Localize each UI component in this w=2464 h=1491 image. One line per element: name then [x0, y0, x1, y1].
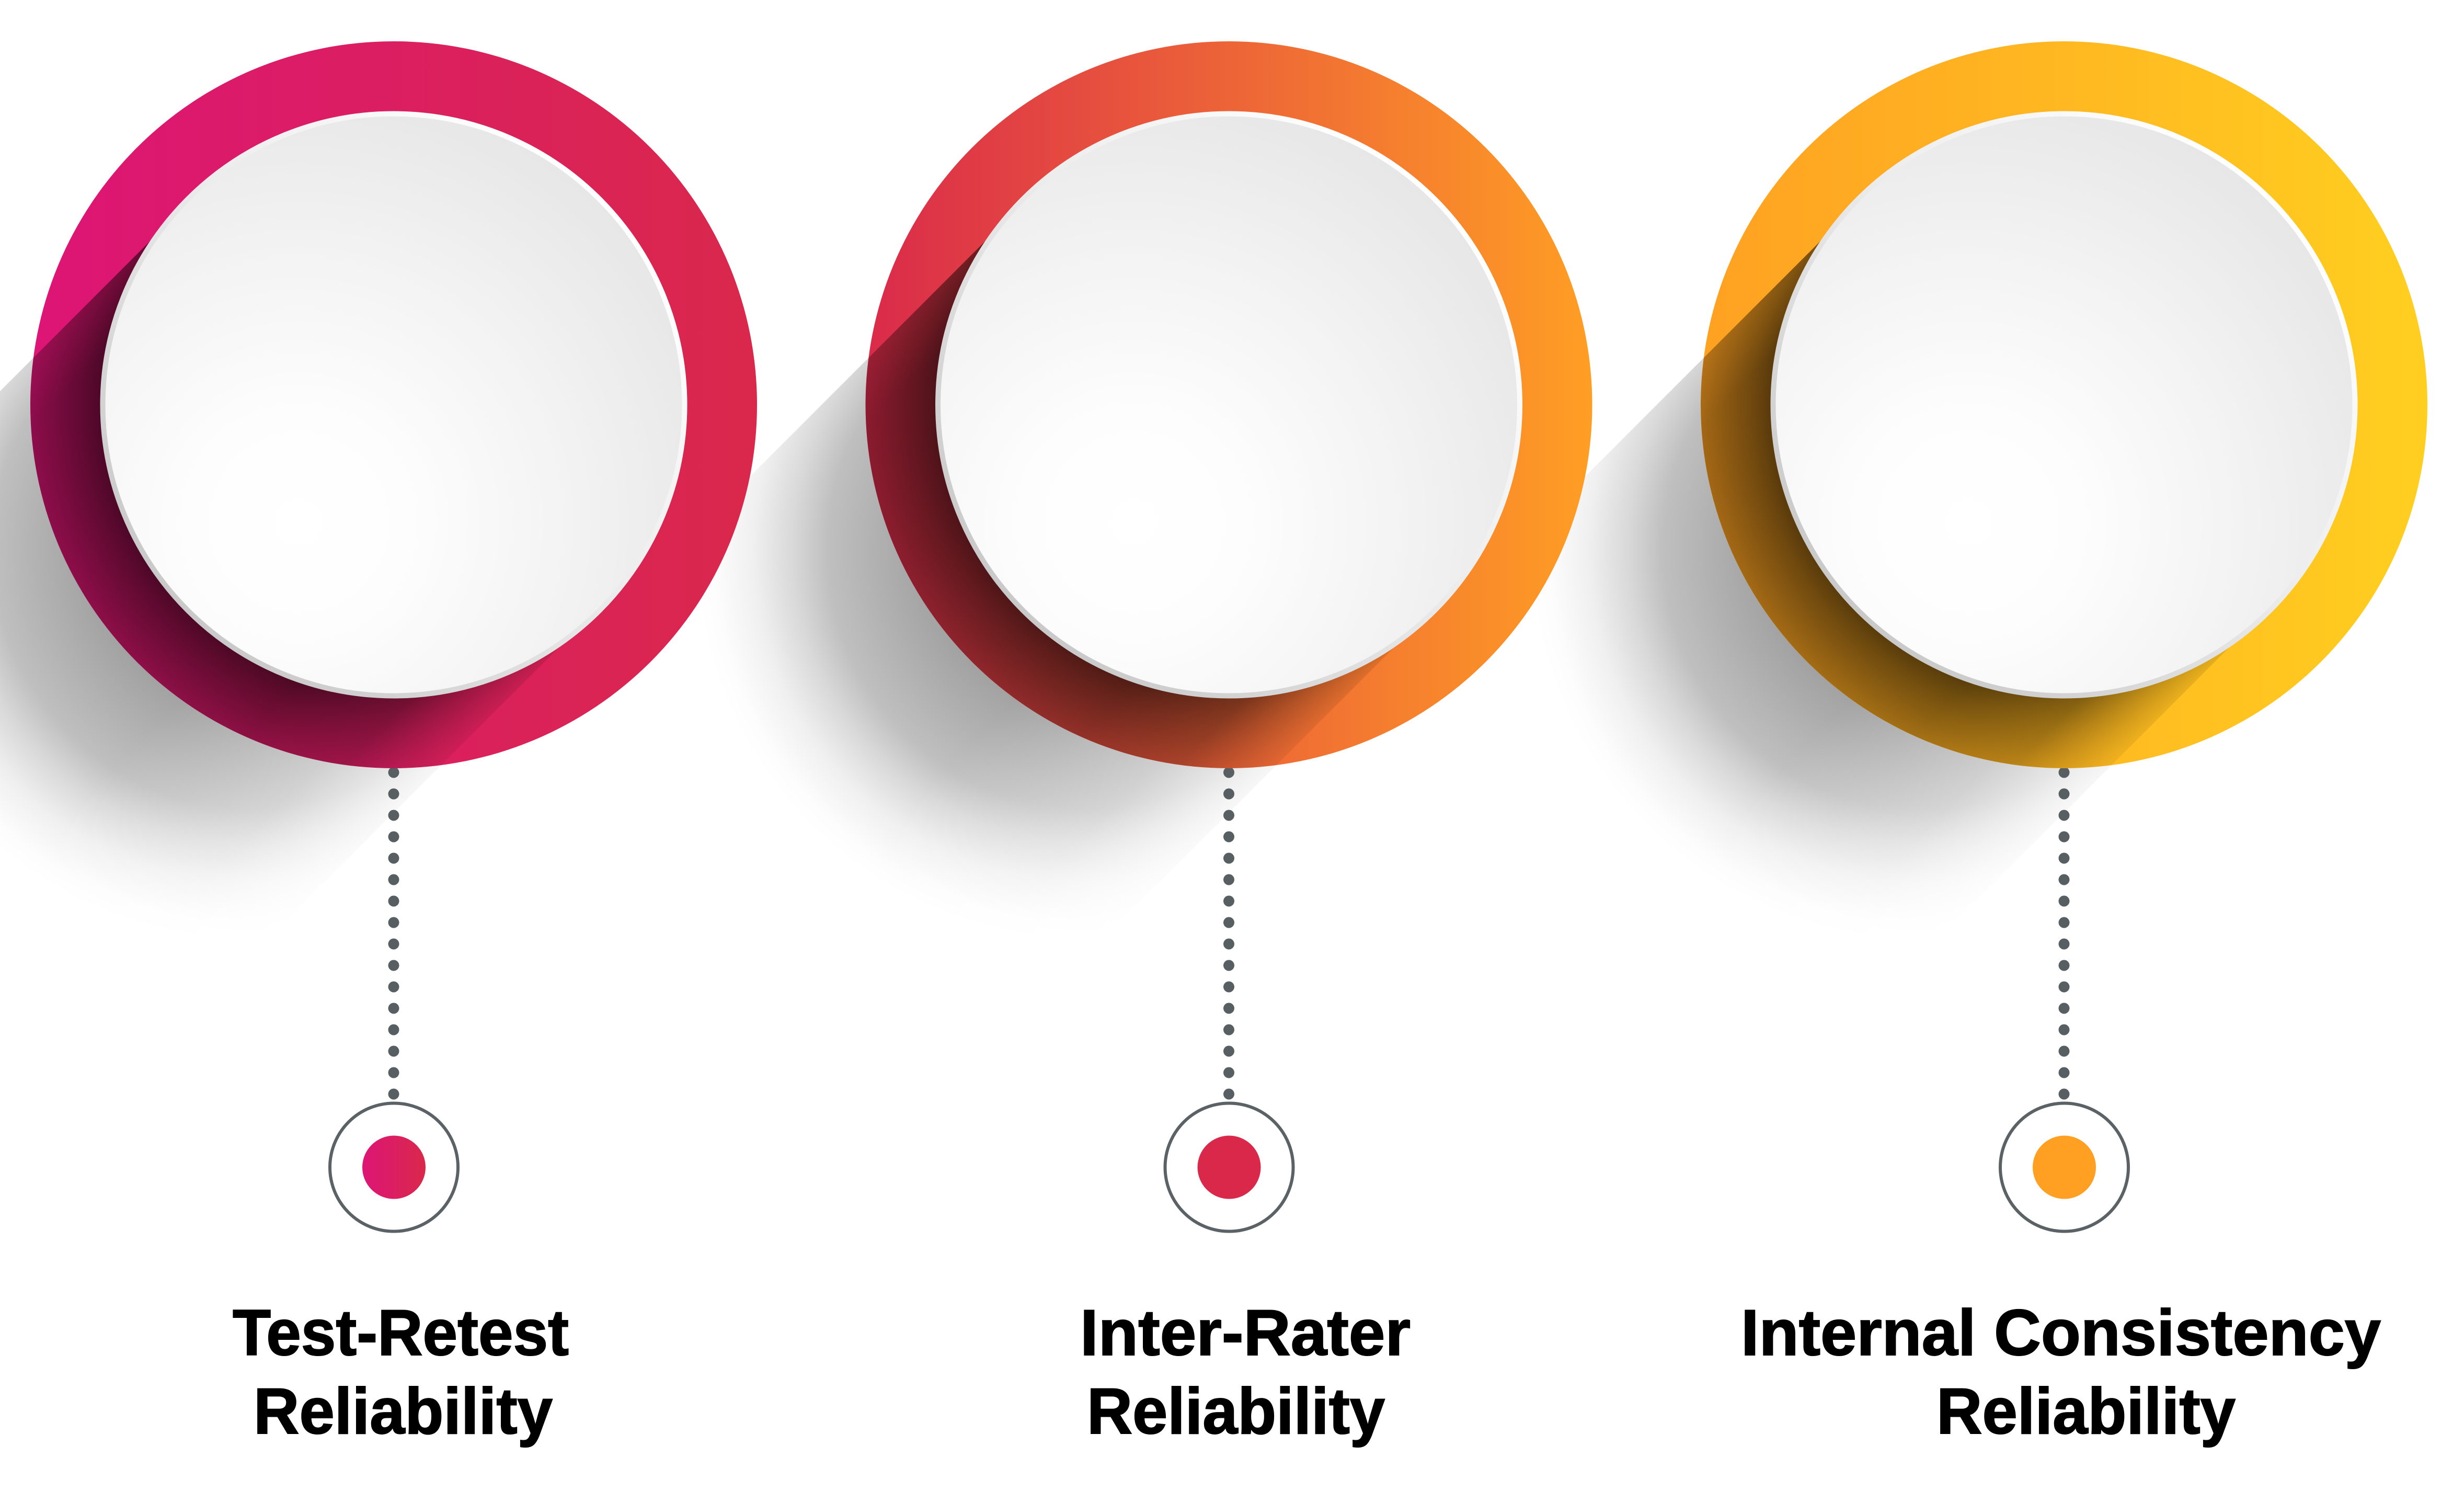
inner disc 2	[938, 114, 1520, 696]
label: Inter-Rater Reliability	[1080, 1297, 1411, 1448]
outer ring 1	[30, 41, 757, 768]
outer ring 3	[1701, 41, 2427, 768]
marker: target circle 3	[2000, 1103, 2128, 1231]
inner disc 3	[1773, 114, 2355, 696]
drop shadow: circle 3	[1567, 358, 2111, 887]
long shadow on ring 1	[30, 241, 558, 768]
label: Internal Consistency Reliability	[1741, 1297, 2381, 1448]
outer ring 2	[866, 41, 1592, 768]
label: Inter-Rater Reliability: Reliability	[1087, 1375, 1385, 1448]
label: Internal Consistency Reliability: Internal Consistency	[1741, 1297, 2381, 1369]
drop shadow: circle 2	[732, 358, 1276, 887]
marker: target circle 1	[330, 1103, 458, 1231]
connector: dotted line 2	[1223, 772, 1234, 1096]
connector: dotted line 3	[2059, 772, 2069, 1096]
label: Test-Retest Reliability: Test-Retest	[233, 1297, 569, 1369]
panel: Inter-Rater Reliability	[866, 41, 1592, 1448]
inner disc 1	[102, 114, 685, 696]
label: Inter-Rater Reliability: Inter-Rater	[1080, 1297, 1411, 1369]
long shadow on ring 2	[866, 241, 1394, 768]
label: Test-Retest Reliability: Reliability	[254, 1375, 553, 1448]
label: Internal Consistency Reliability: Reliability	[1936, 1375, 2236, 1448]
marker: target circle 2	[1165, 1103, 1293, 1231]
label: Test-Retest Reliability	[233, 1297, 569, 1448]
group 2 graphics	[866, 41, 1592, 1231]
group 3 graphics	[1701, 41, 2427, 1231]
panel: Test-Retest Reliability	[30, 41, 757, 1448]
drop shadow: circle 1	[0, 358, 441, 887]
long shadow on ring 3	[1701, 41, 2427, 768]
panel: Internal Consistency Reliability	[1701, 41, 2427, 1448]
connector: dotted line 1	[388, 772, 399, 1096]
